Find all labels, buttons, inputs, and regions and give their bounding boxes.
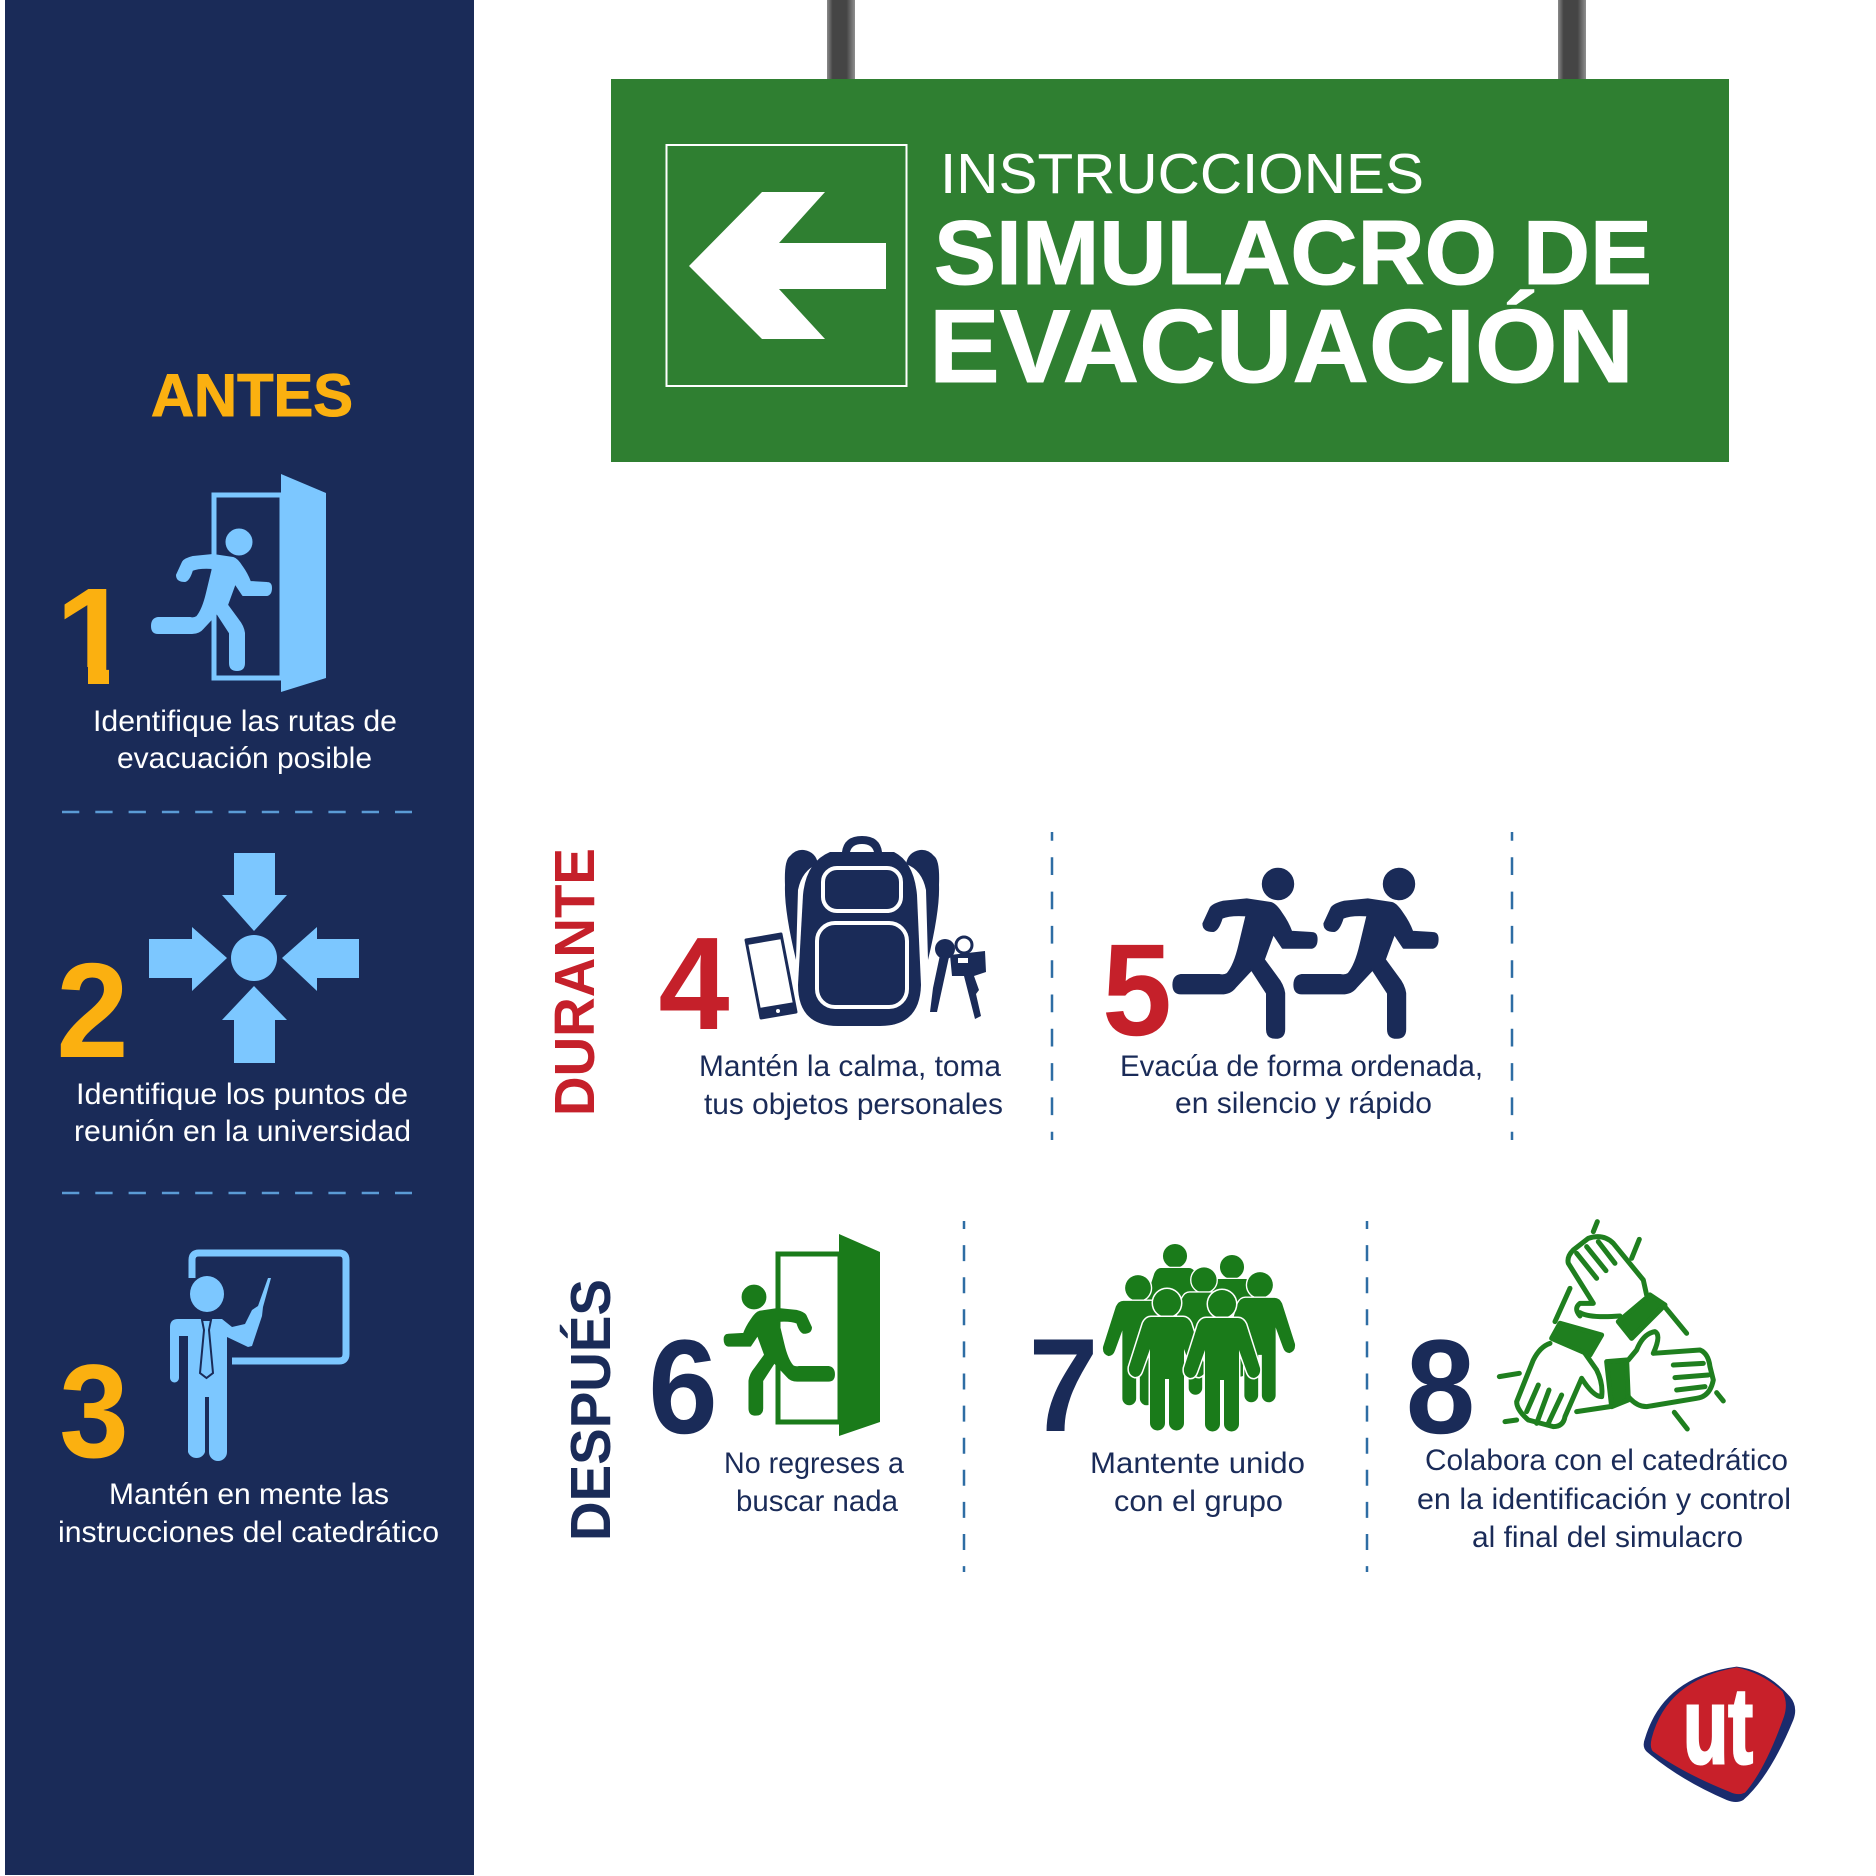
step 4 text: tus objetos personales: [704, 1088, 1003, 1121]
step 3 text: Mantén en mente las: [109, 1478, 389, 1511]
step 8 text: [1417, 1444, 1791, 1554]
step 5: [1102, 869, 1483, 1120]
step 2: [56, 853, 411, 1148]
number 3: 3: [59, 1338, 129, 1486]
step 4 text: [699, 1050, 1003, 1121]
step 8: [1406, 1222, 1791, 1554]
step 8 text: en la identificación y control: [1417, 1483, 1791, 1516]
heading: antes: ANTES: [151, 362, 353, 429]
step 1 text: Identifique las rutas de: [93, 705, 397, 738]
sign title: [929, 142, 1652, 405]
step 3: [58, 1253, 439, 1549]
step 4 text: Mantén la calma, toma: [699, 1050, 1001, 1083]
step 3 text: instrucciones del catedrático: [58, 1516, 439, 1549]
icon: group of people: [1103, 1244, 1295, 1432]
icon: backpack: [785, 836, 939, 1026]
section: despues: [559, 1221, 1791, 1572]
step 6 text: [724, 1447, 904, 1518]
icon: two runners: [1174, 869, 1437, 1038]
panel: antes: [5, 0, 474, 1875]
number 2: 2: [56, 935, 129, 1086]
icon: keys: [930, 937, 986, 1019]
panel background: [5, 0, 474, 1875]
icon: meeting point arrows: [149, 853, 359, 1063]
hanging sign: [611, 0, 1729, 462]
step 8 text: al final del simulacro: [1472, 1521, 1743, 1554]
step 2 text: reunión en la universidad: [74, 1115, 411, 1148]
logo: ut: [1683, 1665, 1753, 1786]
step 7 text: [1090, 1447, 1305, 1518]
icon: joined hands: [1499, 1222, 1723, 1429]
step 7 text: Mantente unido: [1090, 1447, 1305, 1480]
sign title: SIMULACRO DE: [934, 203, 1652, 304]
number 6: 6: [648, 1313, 718, 1462]
step 6 text: No regreses a: [724, 1447, 904, 1480]
sign board: [611, 79, 1729, 462]
step 1: [48, 474, 397, 775]
step 1 text: evacuación posible: [117, 742, 372, 775]
icon: teacher at board: [170, 1253, 346, 1461]
section: durante: [543, 832, 1512, 1140]
sign pole right: [1558, 0, 1586, 80]
step 7: [1029, 1244, 1305, 1518]
sign title: INSTRUCCIONES: [940, 142, 1424, 206]
step 6 text: buscar nada: [736, 1485, 898, 1518]
icon: runner and door: [725, 1234, 880, 1436]
number 5: 5: [1102, 916, 1172, 1063]
step 5 text: Evacúa de forma ordenada,: [1120, 1050, 1483, 1083]
step 1 text: [93, 705, 397, 775]
number 7: 7: [1029, 1312, 1098, 1460]
icon: left arrow: [689, 192, 886, 339]
arrow box frame: [666, 145, 906, 386]
step 4: [658, 836, 1003, 1121]
icon: phone: [746, 934, 797, 1019]
step 5 text: en silencio y rápido: [1175, 1087, 1432, 1120]
heading: despues: DESPUÉS: [559, 1279, 623, 1541]
number 1: 1: [55, 560, 132, 714]
step 5 text: [1120, 1050, 1483, 1120]
logo: [1644, 1665, 1795, 1802]
number 8: 8: [1406, 1313, 1475, 1462]
step 7 text: con el grupo: [1114, 1485, 1283, 1518]
step 2 text: [74, 1078, 411, 1148]
sign title: EVACUACIÓN: [929, 289, 1634, 405]
step 6: [648, 1234, 904, 1518]
step 3 text: [58, 1478, 439, 1549]
sign pole left: [827, 0, 855, 80]
heading: durante: DURANTE: [543, 848, 607, 1116]
icon: runner leaving door: [152, 474, 326, 692]
step 2 text: Identifique los puntos de: [76, 1078, 408, 1111]
number 4: 4: [658, 910, 730, 1057]
step 8 text: Colabora con el catedrático: [1425, 1444, 1788, 1477]
